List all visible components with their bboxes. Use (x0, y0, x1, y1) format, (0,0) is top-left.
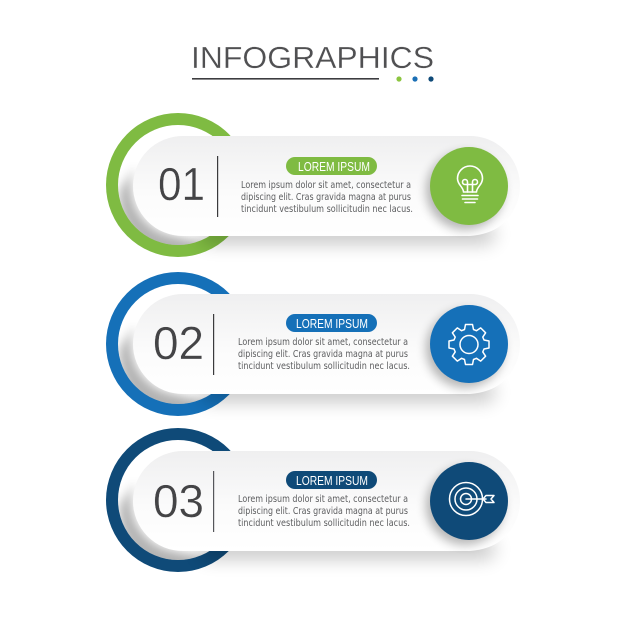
icon: gear (430, 305, 508, 383)
icon: light bulb (430, 147, 508, 225)
icon circle shadow (426, 310, 504, 388)
text block (238, 494, 410, 529)
text block: Lorem ipsum dolor sit amet, consectetur a (238, 494, 408, 505)
panel: step 03 (106, 428, 520, 572)
divider (213, 314, 214, 375)
text block: Lorem ipsum dolor sit amet, consectetur a (238, 337, 408, 348)
panel: step 02 (106, 272, 520, 416)
number: 03 (153, 475, 204, 527)
icon circle shadow (426, 152, 504, 230)
text block: Lorem ipsum dolor sit amet, consectetur a (241, 180, 411, 191)
ring: blue (106, 272, 250, 416)
number: 02 (153, 317, 204, 369)
card shadow (200, 382, 495, 402)
card (133, 136, 520, 236)
inner ring shadow (118, 170, 206, 245)
card shadow (200, 224, 495, 244)
inner ring shadow (118, 485, 206, 560)
ring: green (106, 113, 250, 257)
text block: dipiscing elit. Cras gravida magna at purus (238, 349, 408, 360)
icon circle shadow (426, 467, 504, 545)
panel: step 01 (106, 113, 520, 258)
text block: tincidunt vestibulum sollicitudin nec lacus. (241, 204, 413, 215)
text block: dipiscing elit. Cras gravida magna at purus (238, 506, 408, 517)
pill heading: LOREM IPSUM (296, 473, 368, 488)
pill heading: LOREM IPSUM (296, 316, 368, 331)
text block: tincidunt vestibulum sollicitudin nec lacus. (238, 361, 410, 372)
title: INFOGRAPHICS (191, 40, 434, 75)
text block (241, 180, 413, 215)
card (133, 451, 520, 551)
pill heading (286, 471, 377, 489)
card shadow (200, 539, 495, 559)
ring: navy (106, 428, 250, 572)
pill heading (286, 314, 377, 332)
pill heading: LOREM IPSUM (298, 159, 370, 174)
divider (213, 471, 214, 532)
divider (217, 156, 218, 217)
text block: dipiscing elit. Cras gravida magna at purus (241, 192, 411, 203)
text block (238, 337, 410, 372)
inner ring shadow (118, 328, 207, 404)
icon: target (430, 462, 508, 540)
number: 01 (158, 158, 205, 210)
text block: tincidunt vestibulum sollicitudin nec lacus. (238, 518, 410, 529)
card (133, 294, 520, 394)
pill heading (286, 157, 377, 175)
